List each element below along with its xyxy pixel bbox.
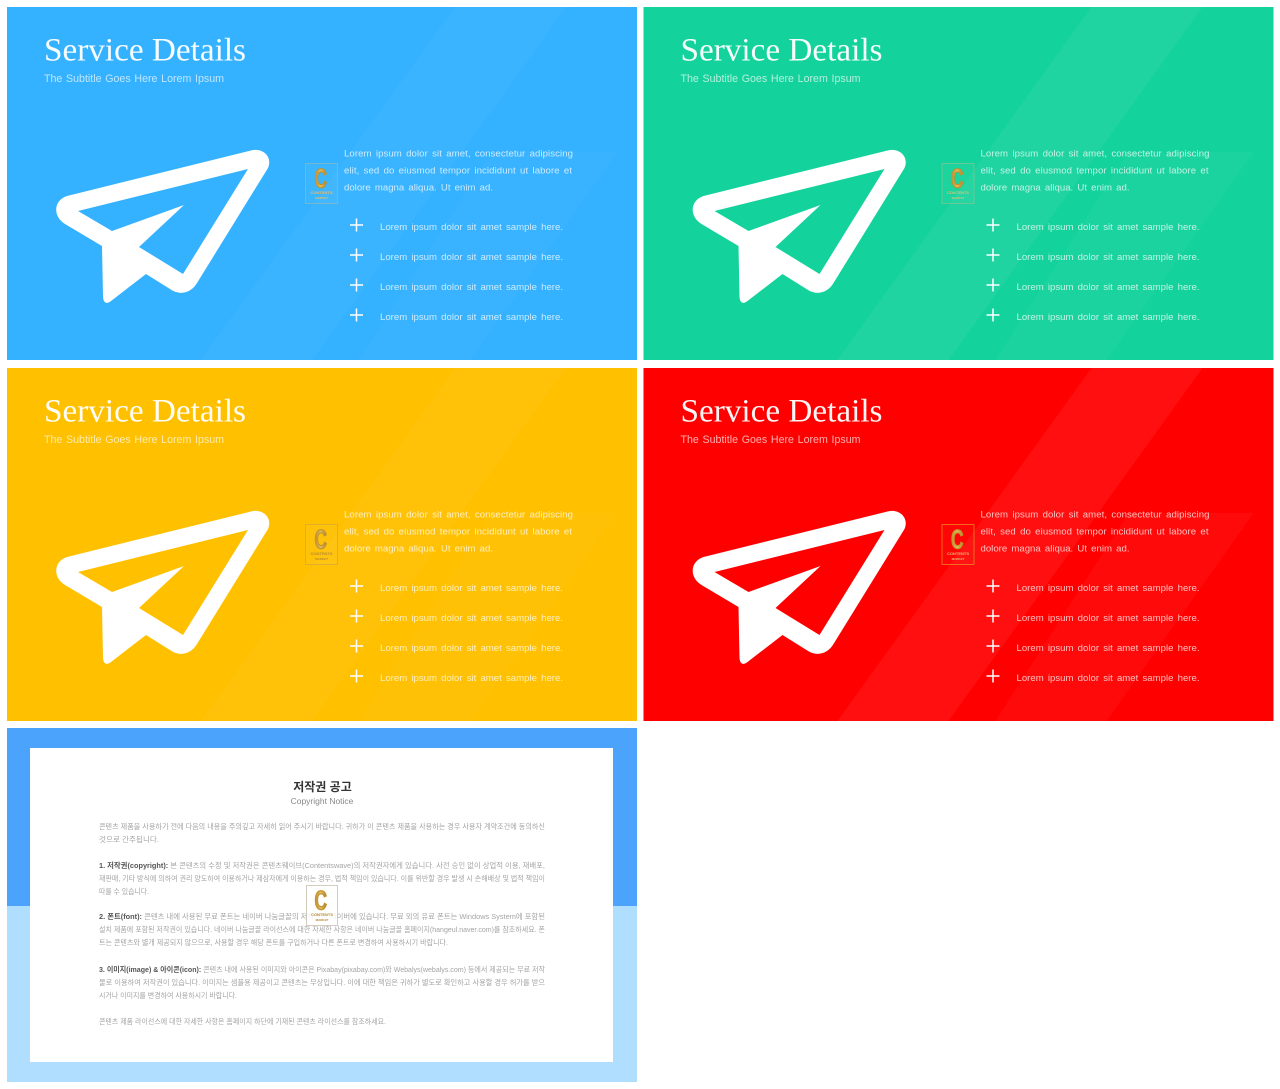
list with plus icons: Lorem ipsum dolor sit amet sample here. xyxy=(1016,252,1200,263)
body text xyxy=(980,510,1210,554)
list with plus icons: Lorem ipsum dolor sit amet sample here. xyxy=(1016,613,1200,624)
list with plus icons xyxy=(350,580,563,684)
body text: dolore magna aliqua. Ut enim ad. xyxy=(980,182,1130,194)
list with plus icons: Lorem ipsum dolor sit amet sample here. xyxy=(1016,222,1200,233)
paragraph: copyright: 1. 저작권(copyright): 본 콘텐츠의 수정 및 저작권은 콘텐츠웨이브(Contentswave)의 저작권자에게 있습니다. 사전 승인 없이 상업적 이용, 재배포, xyxy=(99,860,545,870)
logo badge: C xyxy=(951,525,963,554)
list with plus icons: Lorem ipsum dolor sit amet sample here. xyxy=(380,583,563,594)
logo badge: C xyxy=(314,164,327,193)
paragraph: font: 2. 폰트(font): 콘텐츠 내에 사용된 무료 폰트는 네이버 나눔글꼴의 저작권이 네이버에 있습니다. 무료 외의 유료 폰트는 Windows System에 포함된 xyxy=(99,911,545,921)
list with plus icons: Lorem ipsum dolor sit amet sample here. xyxy=(380,643,563,654)
subtitle: The Subtitle Goes Here Lorem Ipsum xyxy=(680,73,860,85)
logo badge: C xyxy=(951,164,963,193)
body text: dolore magna aliqua. Ut enim ad. xyxy=(344,182,493,194)
panel: yellow service details xyxy=(7,368,637,721)
subtitle: The Subtitle Goes Here Lorem Ipsum xyxy=(44,73,224,85)
paragraph: copyright xyxy=(99,860,545,896)
body text: dolore magna aliqua. Ut enim ad. xyxy=(344,544,493,554)
list with plus icons: Lorem ipsum dolor sit amet sample here. xyxy=(380,613,563,624)
closing line: 콘텐츠 제품 라이선스에 대한 자세한 사항은 홈페이지 하단에 기재된 콘텐츠 라이선스를 참조하세요. xyxy=(99,1016,386,1026)
icon: paper plane xyxy=(56,511,269,664)
list with plus icons xyxy=(986,580,1200,684)
intro paragraph xyxy=(99,821,545,844)
list with plus icons: Lorem ipsum dolor sit amet sample here. xyxy=(1016,282,1200,293)
logo badge xyxy=(306,524,338,564)
logo badge: CONTENTS xyxy=(947,190,969,195)
heading: copyright notice: 저작권 공고 xyxy=(293,779,352,794)
logo badge: CONTENTS xyxy=(947,551,969,556)
icon: paper plane xyxy=(56,150,269,303)
paragraph: image and icon: 3. 이미지(image) & 아이콘(icon): 콘텐츠 내에 사용된 이미지와 아이콘은 Pixabay(pixabay.com)와 Webalys(webalys.com) 등에서 제공되는 무료 저작 xyxy=(99,964,545,974)
logo badge: C xyxy=(314,525,327,554)
body text: elit, sed do eiusmod tempor incididunt ut labore et xyxy=(980,526,1209,538)
logo badge: CONTENTS xyxy=(310,190,333,195)
body text: Lorem ipsum dolor sit amet, consectetur adipiscing xyxy=(344,510,573,520)
logo badge xyxy=(306,886,338,926)
subtitle: The Subtitle Goes Here Lorem Ipsum xyxy=(680,434,860,446)
intro paragraph: 것으로 간주됩니다. xyxy=(99,834,159,844)
paragraph: copyright: 따를 수 있습니다. xyxy=(99,887,149,896)
title: Service Details xyxy=(680,32,883,68)
logo badge: CONTENTS xyxy=(311,912,333,917)
list with plus icons xyxy=(986,218,1200,323)
list with plus icons: Lorem ipsum dolor sit amet sample here. xyxy=(380,222,563,233)
paragraph: copyright: 재판매, 기타 방식에 의하여 권리 양도하여 이용하거나 제삼자에게 이용하는 경우, 법적 책임이 있습니다. 이를 위반할 경우 발생 시 손해배상 및 법적 책임이 xyxy=(99,873,545,883)
list with plus icons xyxy=(350,218,563,323)
title: Service Details xyxy=(680,394,883,430)
list with plus icons: Lorem ipsum dolor sit amet sample here. xyxy=(380,282,563,293)
logo badge: MARKET xyxy=(952,557,965,561)
body text: elit, sed do eiusmod tempor incididunt ut labore et xyxy=(980,166,1209,176)
paragraph: image and icon: 시거나 이미지를 변경하여 사용하시기 바랍니다. xyxy=(99,990,237,1000)
logo badge: MARKET xyxy=(315,557,328,561)
paragraph: font: 트는 콘텐츠와 별개 제공되지 않으므로, 사용할 경우 해당 폰트를 구입하거나 다른 폰트로 변경하여 사용하시기 바랍니다. xyxy=(99,937,448,947)
panel: red service details xyxy=(644,368,1274,721)
panel: green service details xyxy=(644,7,1274,360)
logo badge: CONTENTS xyxy=(310,551,333,556)
body text xyxy=(980,148,1210,194)
title: Service Details xyxy=(44,32,246,68)
panel: copyright notice xyxy=(7,728,637,1082)
icon: paper plane xyxy=(693,511,906,664)
logo badge: MARKET xyxy=(315,196,328,200)
logo badge xyxy=(942,524,974,564)
intro paragraph: 콘텐츠 제품을 사용하기 전에 다음의 내용을 주의깊고 자세히 읽어 주시기 바랍니다. 귀하가 이 콘텐츠 제품을 사용하는 경우 사용자 계약조건에 동의하신 xyxy=(99,821,545,831)
body text xyxy=(344,148,573,194)
body text: Lorem ipsum dolor sit amet, consectetur adipiscing xyxy=(980,148,1210,160)
panel: blue service details xyxy=(7,7,637,360)
paragraph: font: 설치 제품에 포함된 저작권이 있습니다. 네이버 나눔글꼴 라이선스에 대한 자세한 사항은 네이버 나눔글꼴 홈페이지(hangeul.naver.com)를 참조하세요. 폰 xyxy=(99,924,545,934)
body text: elit, sed do eiusmod tempor incididunt ut labore et xyxy=(344,526,572,538)
icon: paper plane xyxy=(693,150,906,303)
list with plus icons: Lorem ipsum dolor sit amet sample here. xyxy=(380,673,563,684)
subtitle: The Subtitle Goes Here Lorem Ipsum xyxy=(44,434,224,446)
title: Service Details xyxy=(44,394,246,430)
body text: elit, sed do eiusmod tempor incididunt ut labore et xyxy=(344,166,572,176)
paragraph: image and icon: 물로 이용하여 저작권이 있습니다. 이미지는 샘플용 제공이고 콘텐츠는 무상입니다. 이에 대한 책임은 귀하가 별도로 확인하고 사용할 경우 허가를 받으 xyxy=(99,977,545,987)
subheading: Copyright Notice xyxy=(291,796,354,806)
logo badge xyxy=(306,164,338,204)
paragraph: font xyxy=(99,911,545,947)
list with plus icons: Lorem ipsum dolor sit amet sample here. xyxy=(380,312,563,323)
list with plus icons: Lorem ipsum dolor sit amet sample here. xyxy=(1016,312,1200,323)
paragraph: image and icon xyxy=(99,964,545,1000)
logo badge xyxy=(942,164,974,204)
body text: dolore magna aliqua. Ut enim ad. xyxy=(980,544,1130,554)
logo badge: MARKET xyxy=(316,918,329,922)
list with plus icons: Lorem ipsum dolor sit amet sample here. xyxy=(1016,673,1200,684)
logo badge: MARKET xyxy=(952,196,965,200)
body text: Lorem ipsum dolor sit amet, consectetur adipiscing xyxy=(980,510,1210,520)
list with plus icons: Lorem ipsum dolor sit amet sample here. xyxy=(1016,643,1200,654)
logo badge: C xyxy=(314,886,327,915)
body text: Lorem ipsum dolor sit amet, consectetur adipiscing xyxy=(344,148,573,160)
list with plus icons: Lorem ipsum dolor sit amet sample here. xyxy=(380,252,563,263)
list with plus icons: Lorem ipsum dolor sit amet sample here. xyxy=(1016,583,1200,594)
body text xyxy=(344,510,573,554)
